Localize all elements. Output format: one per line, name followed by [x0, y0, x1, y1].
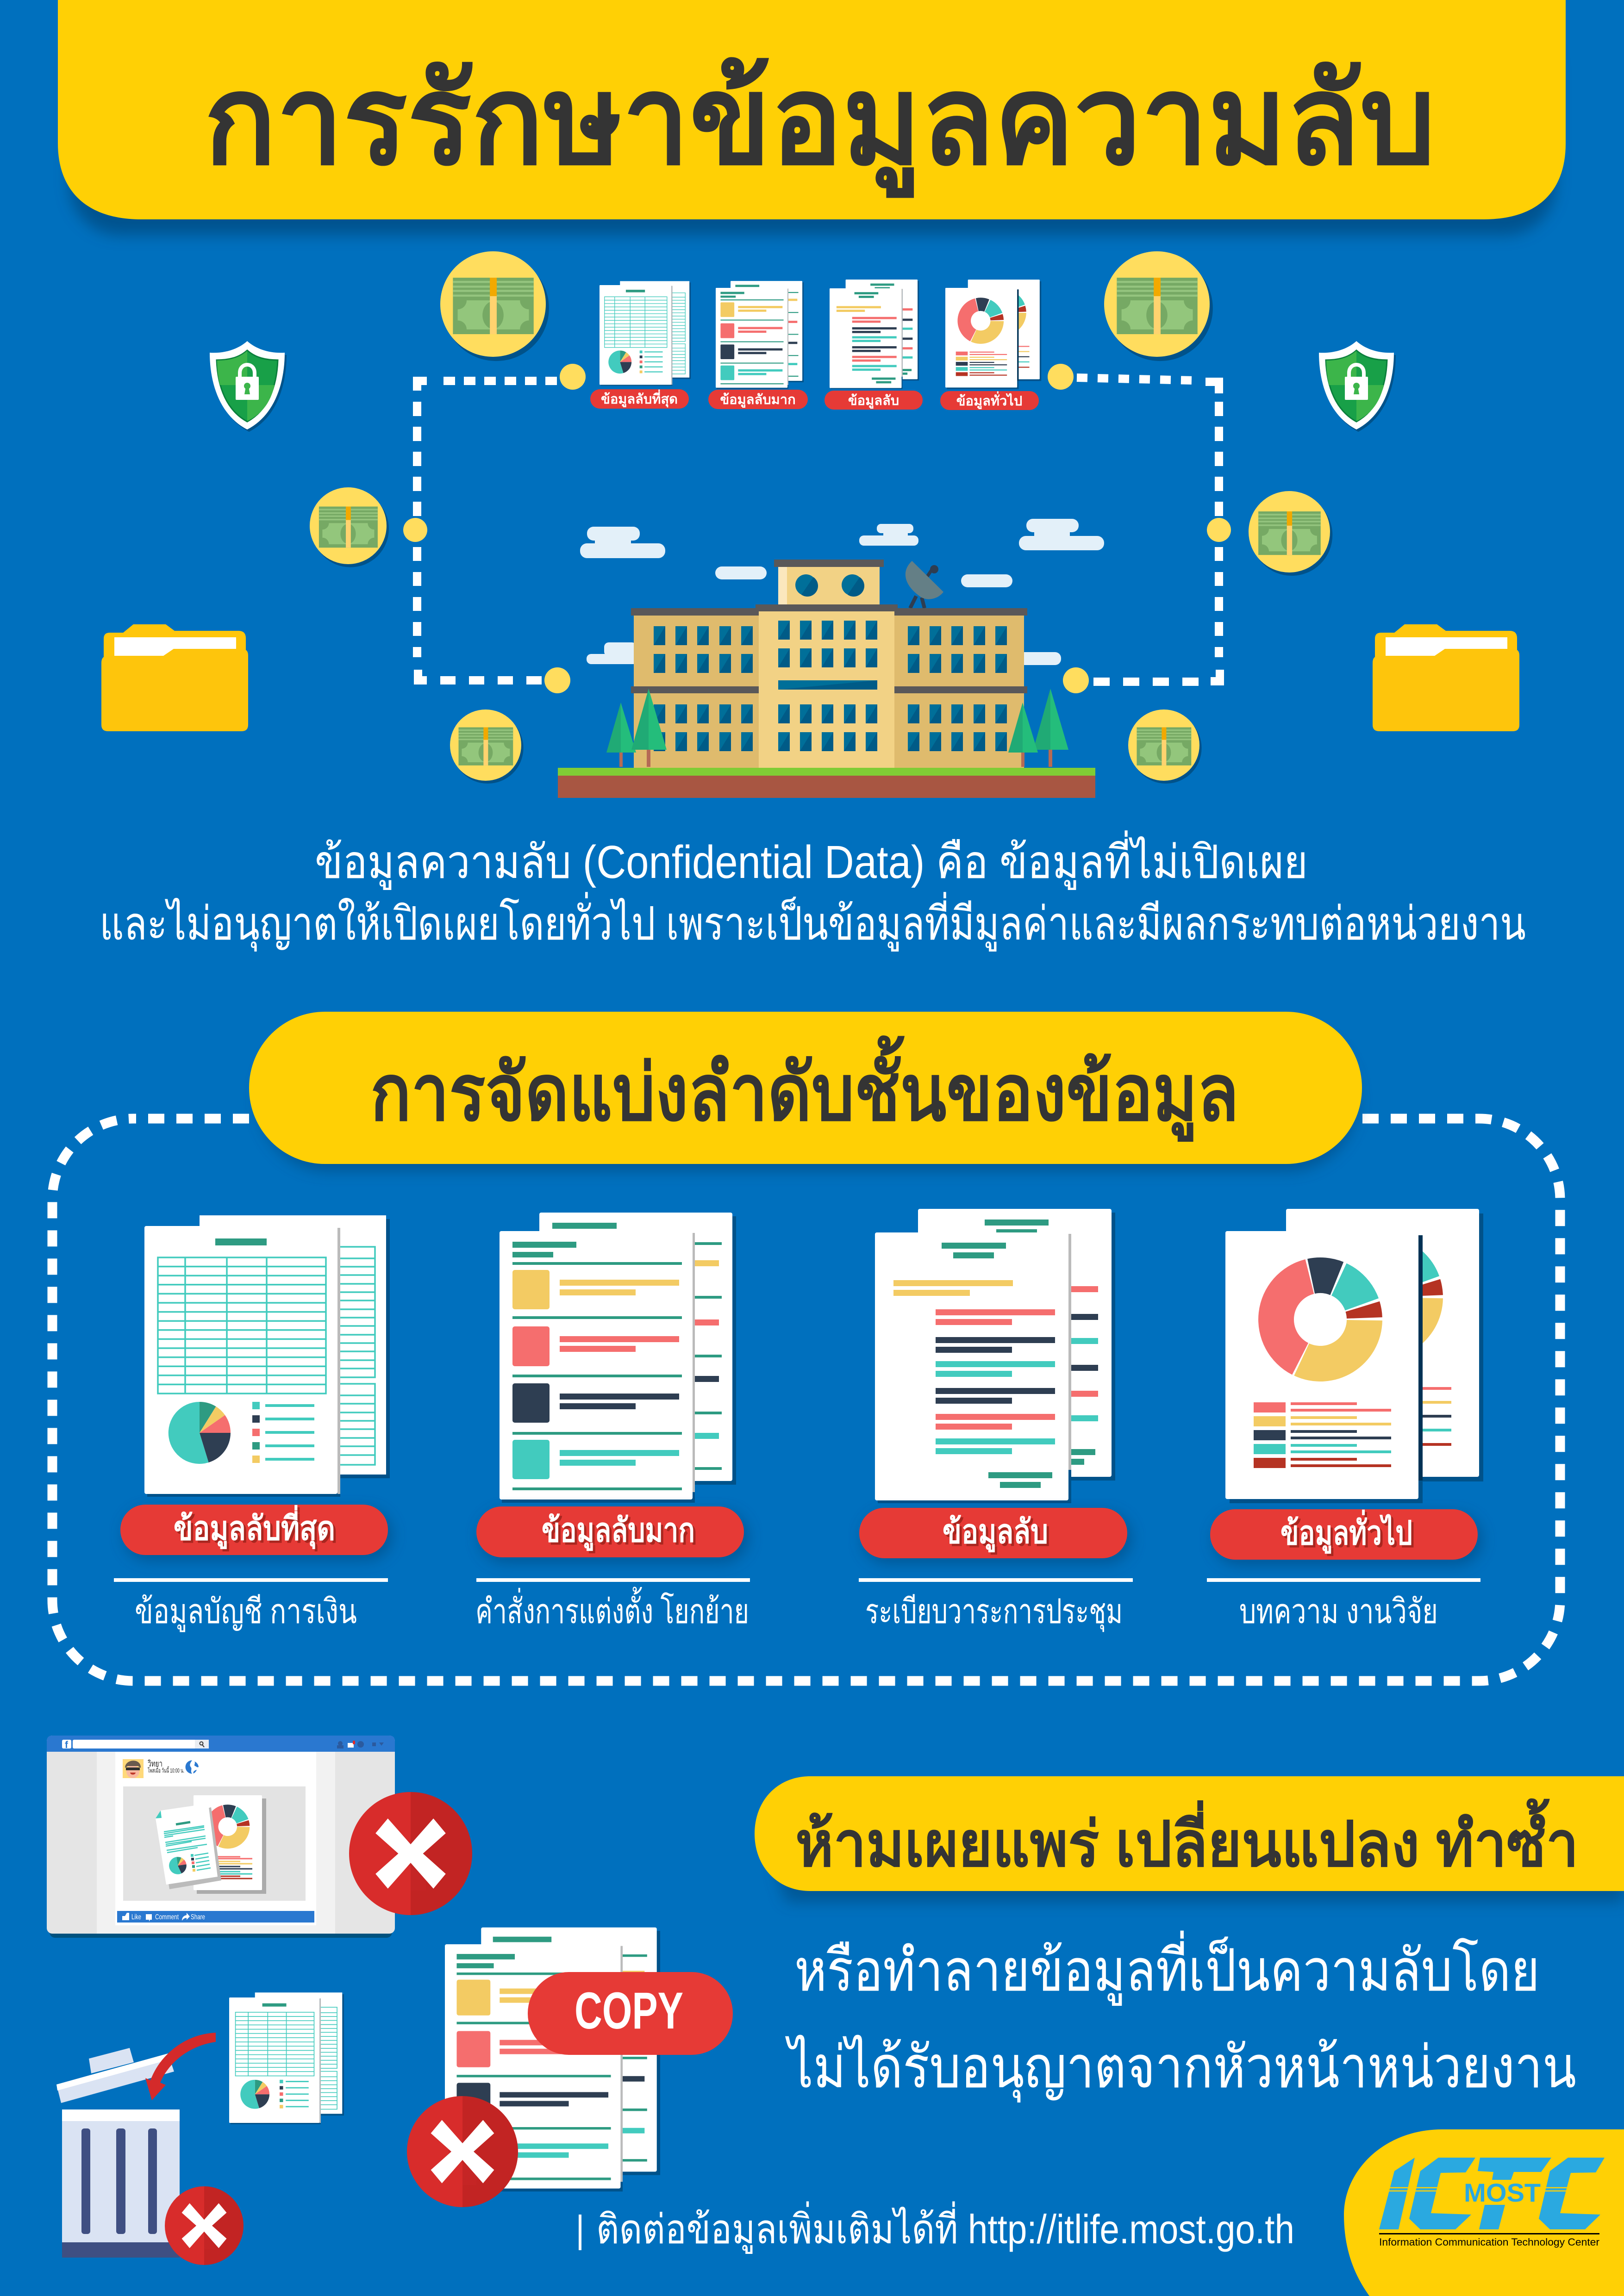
illustration: social media post: วิทยา — [148, 1759, 162, 1769]
illustration: social media post: โพสเมื่อ วันนี้ 10:00 น. — [148, 1766, 184, 1774]
icon: shield left — [210, 341, 287, 432]
small document set with labels: ข้อมูลทั่วไป — [956, 391, 1022, 409]
icon: prohibit delete — [165, 2186, 244, 2265]
title banner: การรักษาข้อมูลความลับ — [204, 51, 1436, 199]
class 1: most confidential: ข้อมูลบัญชี การเงิน — [135, 1592, 357, 1632]
illustration: social media post: f — [65, 1740, 69, 1750]
illustration: trash bin with document — [56, 1992, 344, 2258]
heading: data classification — [249, 1012, 1362, 1171]
connector dots — [403, 364, 1231, 693]
class 4: general: ข้อมูลทั่วไป — [1280, 1509, 1412, 1554]
class 4: general — [1207, 1209, 1483, 1630]
icon: money coins — [310, 251, 1332, 784]
small document set with labels: ข้อมูลลับที่สุด — [601, 389, 678, 407]
icon: shield right — [1319, 341, 1396, 432]
icon: folder left — [101, 624, 248, 731]
illustration: copied document — [445, 1928, 660, 2191]
icon: folder right — [1373, 624, 1519, 731]
class 3: confidential — [859, 1209, 1133, 1632]
contact line: ติดต่อข้อมูลเพิ่มเติมได้ที่ http://itlife.most.go.th — [596, 2201, 1294, 2254]
class 1: most confidential: ข้อมูลลับที่สุด — [174, 1505, 335, 1549]
class 2: highly confidential: คำสั่งการแต่งตั้ง โยกย้าย — [475, 1587, 749, 1630]
illustration: social media post: Comment — [155, 1913, 179, 1921]
definition text — [100, 830, 1526, 952]
icon: prohibit post — [349, 1792, 472, 1915]
classification dashed frame — [52, 1119, 1560, 1681]
icon: prohibit copy — [407, 2096, 518, 2207]
illustration: social media post: Like — [131, 1913, 141, 1921]
copy badge: COPY — [575, 1982, 683, 2040]
class 2: highly confidential: ข้อมูลลับมาก — [542, 1512, 695, 1551]
heading: data classification: การจัดแบ่งลำดับชั้นของข้อมูล — [370, 1035, 1239, 1142]
title banner — [58, 0, 1566, 235]
diagram: dashed network loop — [417, 378, 1220, 682]
class 2: highly confidential — [475, 1213, 750, 1630]
warning banner — [755, 1776, 1624, 1902]
logo: ICTC MOST — [1344, 2129, 1624, 2296]
small document set with labels: ข้อมูลลับมาก — [720, 392, 796, 408]
illustration: office building — [558, 560, 1095, 798]
warning body text — [785, 1930, 1576, 2103]
logo: ICTC MOST: MOST — [1464, 2178, 1541, 2207]
illustration: social media post: Share — [191, 1913, 205, 1921]
class 1: most confidential — [114, 1215, 392, 1632]
class 3: confidential: ระเบียบวาระการประชุม — [865, 1592, 1123, 1632]
illustration: social media post — [47, 1736, 395, 1938]
small document set with labels: ข้อมูลลับ — [848, 393, 899, 409]
class 4: general: บทความ งานวิจัย — [1239, 1592, 1438, 1630]
copy badge — [528, 1972, 733, 2055]
small document set with labels — [590, 280, 1041, 410]
class 3: confidential: ข้อมูลลับ — [943, 1513, 1048, 1553]
clouds — [580, 519, 1104, 665]
definition text: ข้อมูลความลับ (Confidential Data) คือ ข้อมูลที่ไม่เปิดเผย — [315, 830, 1308, 890]
logo: ICTC MOST: Information Communication Technology Center — [1379, 2236, 1599, 2248]
warning banner: ห้ามเผยแพร่ เปลี่ยนแปลง ทำซ้ำ — [795, 1798, 1579, 1879]
